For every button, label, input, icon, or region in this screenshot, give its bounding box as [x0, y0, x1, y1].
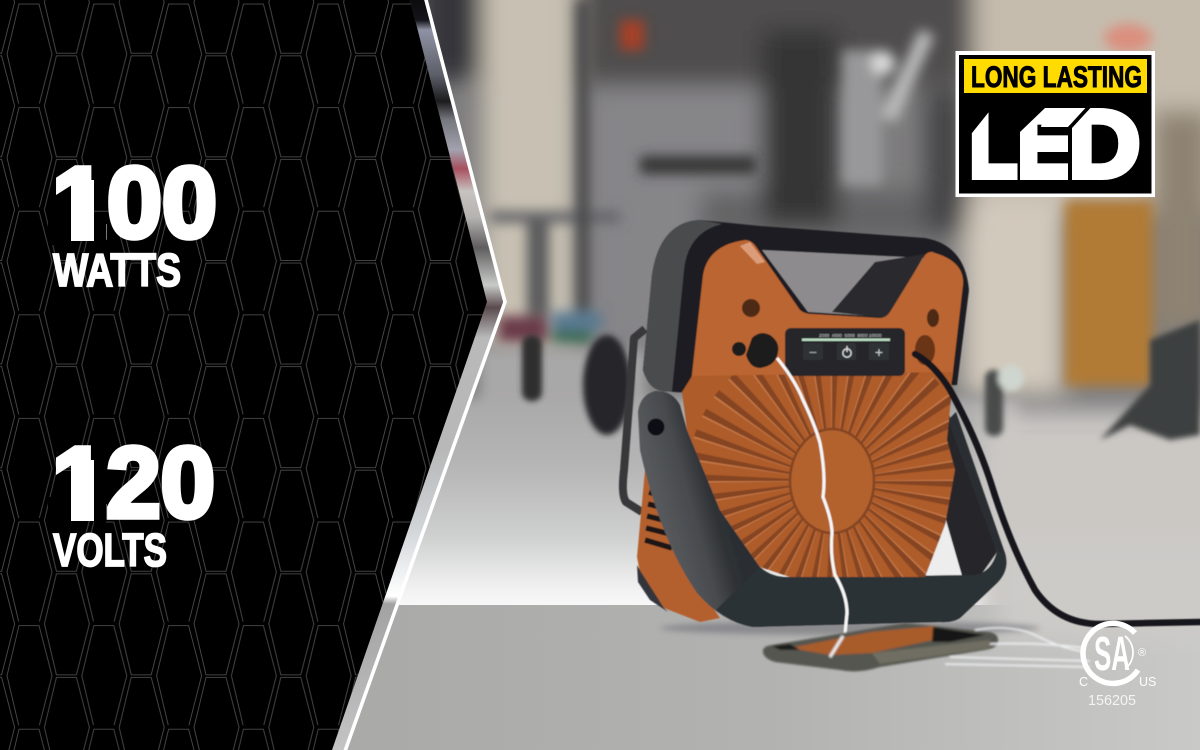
label watts: WATTS	[53, 244, 181, 296]
bracket seen through the handle	[832, 254, 925, 318]
window in the handle	[762, 250, 925, 317]
badge heading: LONG LASTING	[971, 61, 1142, 94]
product: work light	[623, 220, 1200, 635]
number 120: 120	[52, 427, 215, 539]
label volts: VOLTS	[53, 524, 167, 576]
black power cable	[915, 354, 1200, 624]
blurred workshop background photo	[400, 0, 1200, 430]
badge LED wordmark: L	[969, 90, 1018, 198]
badge LED wordmark: E	[1017, 91, 1073, 198]
bright floor seen through the frame	[925, 520, 962, 576]
badge LED wordmark	[964, 90, 1140, 198]
white usb cable	[777, 358, 847, 634]
floor	[330, 350, 1200, 750]
smartphone on the floor	[763, 623, 1090, 671]
Canada label: C	[1079, 675, 1088, 689]
CSA letters: SA	[1094, 628, 1130, 681]
shadow under light	[660, 621, 1040, 635]
stat: 100 watts	[48, 147, 217, 296]
numeral one stem weight in 120	[71, 460, 94, 521]
badge LED wordmark: D	[1067, 90, 1140, 197]
lower U frame	[638, 391, 1006, 627]
orange head face	[690, 240, 963, 392]
panel: black hexagon background	[0, 0, 500, 750]
screw holes	[742, 299, 939, 365]
trim of numeral one foot	[48, 217, 106, 245]
badge: long lasting LED	[956, 51, 1155, 198]
phone screen reflection	[790, 626, 935, 655]
frame pivot screw	[648, 418, 664, 436]
usb cables behind phone	[945, 628, 1090, 667]
head rubber frame	[643, 220, 969, 392]
certificate number: 156205	[1088, 693, 1136, 709]
right arm inner shadow	[935, 412, 997, 576]
minus button: −	[809, 344, 817, 360]
control panel	[785, 328, 905, 376]
rubber plug	[732, 333, 778, 368]
lower frame bottom shading	[716, 552, 1006, 627]
white chevron line	[344, 0, 505, 750]
cable reflection	[830, 636, 843, 657]
trim of numeral one foot in 120	[48, 497, 106, 525]
CSA C ring	[1083, 623, 1138, 683]
orange face highlight	[740, 242, 765, 264]
CSA inner ring	[1125, 636, 1133, 669]
folding wire stand	[623, 329, 645, 512]
certification mark: CSA 156205	[1079, 623, 1156, 709]
power button	[837, 343, 856, 360]
US label: US	[1139, 675, 1156, 689]
brightness scale labels: 2000 4000 6000 8000 10000	[819, 333, 882, 338]
stat: 120 volts	[48, 427, 215, 576]
numeral one stem weight	[71, 180, 94, 241]
registered mark: ®	[1138, 647, 1146, 659]
brightness level bar	[802, 338, 890, 341]
plus button: +	[875, 344, 883, 360]
number 100: 100	[52, 147, 217, 259]
fan body	[682, 372, 955, 577]
head frame left highlight	[643, 220, 722, 392]
rear fins	[637, 470, 720, 622]
background wheels and machine legs	[522, 320, 1200, 440]
photo strip between black panel and white line	[332, 0, 505, 750]
